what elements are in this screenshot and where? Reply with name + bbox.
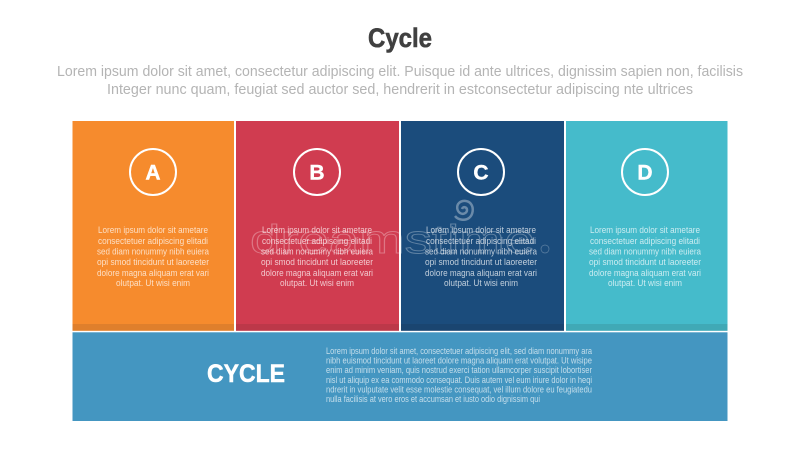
text: B description: olutpat. Ut wisi enim	[280, 278, 354, 288]
text: C description: Lorem ipsum dolor sit ametare	[426, 225, 536, 235]
text: D description: sed diam nonummy nibh euiera	[589, 246, 701, 256]
text: A description: opi smod tincidunt ut laoreeter	[97, 257, 209, 267]
text: D description	[589, 225, 701, 288]
text: C description: dolore magna aliquam erat vari	[425, 268, 537, 278]
watermark	[250, 201, 549, 262]
text: B description: consectetuer adipiscing elitadi	[262, 236, 372, 246]
icon: circle D: D	[637, 162, 653, 184]
title: Cycle	[368, 23, 432, 53]
subtitle: Integer nunc quam, feugiat sed auctor sed, hendrerit in estconsectetur adipiscing nte ultrices	[107, 81, 693, 98]
icon: circle B: B	[309, 162, 325, 184]
text: B description: opi smod tincidunt ut laoreeter	[261, 257, 373, 267]
text: C description	[425, 225, 537, 288]
text: A description: sed diam nonummy nibh euiera	[97, 246, 209, 256]
text: C description: consectetuer adipiscing elitadi	[426, 236, 536, 246]
text: A description: Lorem ipsum dolor sit ametare	[98, 225, 208, 235]
text: B description: Lorem ipsum dolor sit ametare	[262, 225, 372, 235]
band text: ndrerit in vulputate velit esse molestie consequat, vel illum dolore eu feugiatedu	[326, 384, 592, 394]
text: A description: consectetuer adipiscing elitadi	[98, 236, 208, 246]
text: D description: dolore magna aliquam erat vari	[589, 268, 701, 278]
panel: A	[72, 121, 234, 331]
subtitle	[57, 63, 743, 98]
text: C description: olutpat. Ut wisi enim	[444, 278, 518, 288]
band heading: CYCLE	[207, 360, 285, 388]
band text: nisl ut aliquip ex ea commodo consequat. Duis autem vel eum iriure dolor in heqi	[326, 375, 592, 385]
panel: cycle band	[72, 332, 728, 421]
band text: enim ad minim veniam, quis nostrud exerci tation ullamcorper suscipit lobortiser	[326, 365, 592, 375]
panel: D	[566, 121, 728, 331]
icon: circle D	[622, 149, 668, 195]
watermark: dreamstime	[250, 218, 535, 262]
text: A description: dolore magna aliquam erat vari	[97, 268, 209, 278]
icon: circle C: C	[473, 162, 489, 184]
icon: circle A: A	[145, 162, 161, 184]
band text	[326, 346, 592, 404]
text: D description: opi smod tincidunt ut laoreeter	[589, 257, 701, 267]
icon: circle B	[294, 149, 340, 195]
text: C description: sed diam nonummy nibh euiera	[425, 246, 537, 256]
band text: Lorem ipsum dolor sit amet, consectetuer adipiscing elit, sed diam nonummy ara	[326, 346, 592, 356]
text: B description	[261, 225, 373, 288]
text: B description: sed diam nonummy nibh euiera	[261, 246, 373, 256]
subtitle: Lorem ipsum dolor sit amet, consectetur adipiscing elit. Puisque id ante ultrices, dignissim sapien non, facilisis	[57, 63, 743, 80]
band text: nulla facilisis at vero eros et accumsan et iusto odio dignissim qui	[326, 394, 540, 404]
text: A description	[97, 225, 209, 288]
icon: circle C	[458, 149, 504, 195]
text: B description: dolore magna aliquam erat vari	[261, 268, 373, 278]
panel: C	[401, 121, 564, 331]
icon: circle A	[130, 149, 176, 195]
text: D description: olutpat. Ut wisi enim	[608, 278, 682, 288]
text: A description: olutpat. Ut wisi enim	[116, 278, 190, 288]
text: C description: opi smod tincidunt ut laoreeter	[425, 257, 537, 267]
text: D description: Lorem ipsum dolor sit ametare	[590, 225, 700, 235]
panel: B	[236, 121, 399, 331]
text: D description: consectetuer adipiscing elitadi	[590, 236, 700, 246]
band text: nibh euismod tincidunt ut laoreet dolore magna aliquam erat volutpat. Ut wisipe	[326, 356, 592, 366]
